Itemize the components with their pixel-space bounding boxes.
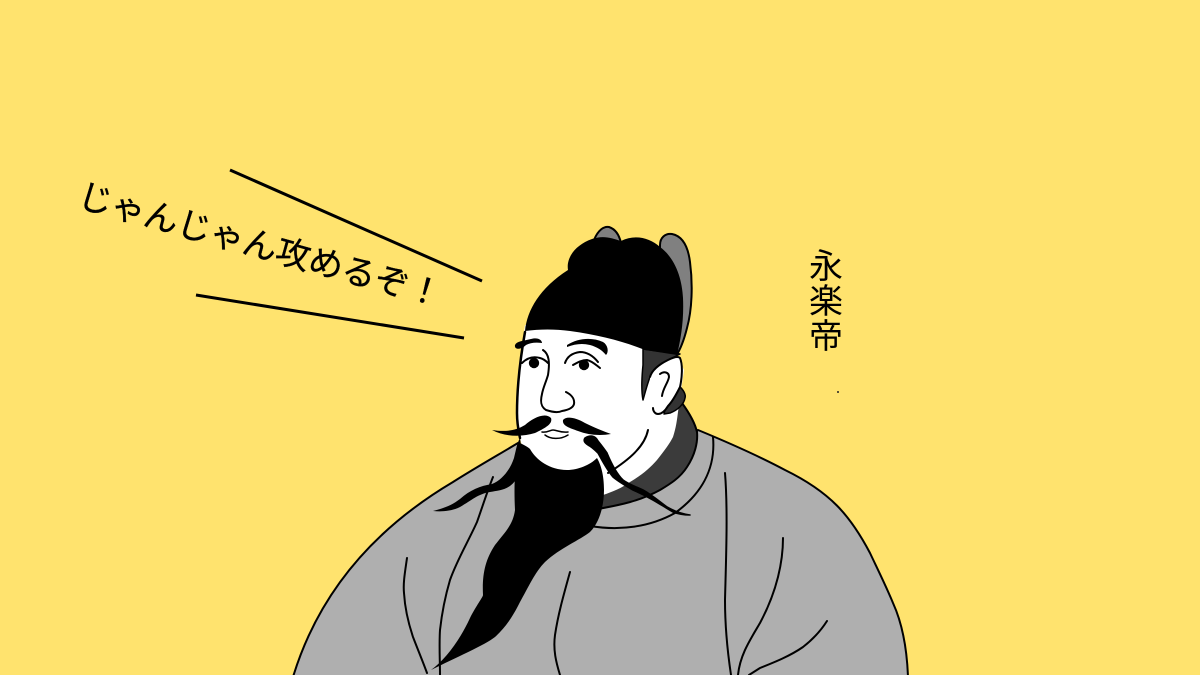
name label: vertical text 永楽帝: 永 (809, 248, 843, 286)
stray dot (837, 391, 839, 393)
eyes (522, 352, 600, 370)
ear (650, 357, 682, 414)
name label: vertical text 永楽帝: 楽 (809, 283, 843, 321)
nose (541, 350, 574, 412)
speech text: rotated exclamation: じゃんじゃん攻めるぞ！ (74, 177, 446, 315)
moustache and side strands (433, 416, 690, 515)
face outline left (517, 332, 525, 438)
hat (525, 237, 683, 355)
robe fold lines (404, 437, 827, 675)
robe body (293, 430, 908, 675)
mouth (542, 430, 568, 438)
collar dark band (590, 385, 697, 509)
face and neck (517, 320, 684, 495)
speech line: upper emphasis line (230, 170, 482, 281)
beard (431, 443, 604, 670)
hair bun behind ear (664, 385, 685, 414)
name label: vertical text 永楽帝: 帝 (809, 318, 843, 356)
speech line: lower emphasis line (196, 295, 464, 338)
ear inner line and jaw line (608, 372, 669, 473)
hair at temple (642, 349, 680, 400)
figure: emperor (293, 227, 908, 675)
name label: vertical text 永楽帝 (809, 248, 843, 356)
headgear wings (594, 227, 692, 356)
eyebrows (515, 338, 608, 355)
